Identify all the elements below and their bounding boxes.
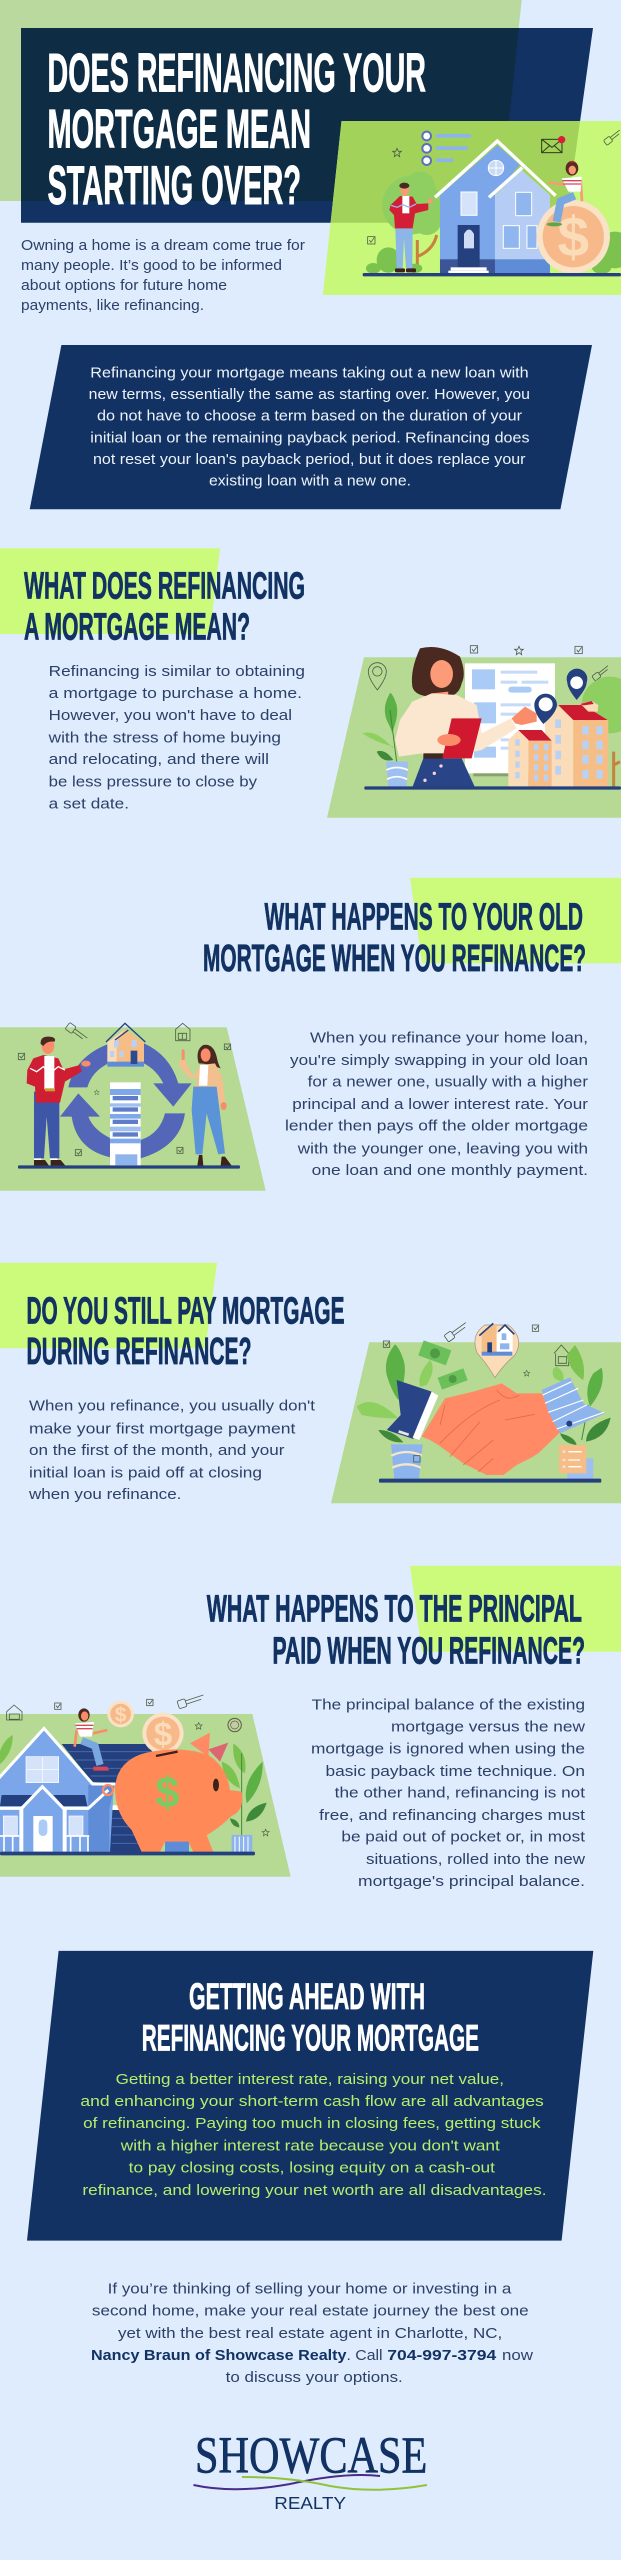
icon: checkbox — [75, 1150, 81, 1156]
text block: advantages and disadvantages — [80, 2072, 547, 2199]
panel: hero illustration — [323, 121, 621, 295]
tree — [582, 677, 621, 787]
intro text: many people. It’s good to be informed — [21, 258, 282, 274]
icon: coin outline — [228, 1718, 241, 1732]
coin small — [107, 1701, 134, 1727]
house — [435, 141, 556, 274]
panel: definition callout — [30, 345, 592, 509]
text block: principal balance: the other hand, refinancing is not — [335, 1786, 585, 1802]
icon: star — [262, 1829, 269, 1836]
house — [106, 1023, 145, 1067]
tree — [366, 172, 442, 274]
panel: getting ahead callout — [27, 1951, 593, 2241]
text block: refinancing similar: Refinancing is similar to obtaining — [49, 664, 305, 680]
icon: checkbox — [532, 1325, 539, 1331]
coin large: $ — [154, 1716, 173, 1753]
icon: checkbox — [575, 646, 582, 654]
text block: refinancing similar: However, you won't have to deal — [49, 708, 292, 724]
icon: star — [393, 148, 401, 157]
bush — [592, 232, 621, 274]
icon: checkbox — [224, 1044, 231, 1050]
listing board — [465, 663, 555, 776]
panel: title block — [21, 28, 593, 223]
text block: principal balance: mortgage is ignored when using the — [311, 1741, 585, 1757]
text block: when you refinance: lender then pays off the older mortgage — [285, 1119, 588, 1135]
woman on coin — [547, 161, 582, 226]
coin: $ — [558, 207, 589, 270]
text block: call to action: If you’re thinking of selling your home or investing in a — [108, 2282, 512, 2298]
text block: principal balance: The principal balance of the existing — [312, 1697, 585, 1713]
panel: handshake illustration — [331, 1321, 621, 1503]
man — [27, 1037, 91, 1166]
icon: star — [515, 646, 523, 655]
text block: first mortgage payment: When you refinance, you usually don't — [29, 1399, 315, 1415]
panel: agent illustration — [327, 646, 621, 818]
icon: house outline — [554, 1345, 569, 1366]
right cuff — [542, 1377, 605, 1433]
logo: Showcase Realty: SHOWCASE — [195, 2428, 427, 2485]
plant pot — [391, 1444, 423, 1479]
panel: definition callout: new terms, essentially the same as starting over. However, you — [89, 387, 530, 403]
text block: call to action: yet with the best real estate agent in Charlotte, NC, — [118, 2326, 502, 2342]
icon: checkbox — [147, 1699, 153, 1706]
coin large — [142, 1713, 184, 1754]
left cuff — [387, 1380, 438, 1440]
piggy bank: $ — [155, 1769, 179, 1817]
icon: star — [524, 1370, 530, 1376]
heading: what does refinancing a mortgage mean — [24, 565, 305, 648]
ground line — [364, 786, 621, 790]
dark roof — [62, 1744, 160, 1852]
section tab: principal paid — [410, 1566, 621, 1652]
panel: definition callout: Refinancing your mortgage means taking out a new loan with — [90, 365, 529, 381]
text block: call to action: 704-997-3794 — [387, 2348, 497, 2364]
text block: refinancing similar: with the stress of home buying — [48, 730, 281, 746]
text block: principal balance — [311, 1697, 586, 1890]
text block: call to action: Nancy Braun of Showcase Realty — [91, 2348, 347, 2364]
intro text: Owning a home is a dream come true for — [21, 238, 305, 254]
icon: location pin small — [534, 694, 557, 724]
plant — [222, 1743, 267, 1852]
buildings — [508, 701, 608, 787]
woman on roof — [75, 1708, 109, 1771]
logo: Showcase Realty — [194, 2428, 427, 2513]
icon: location pin large — [567, 669, 587, 700]
title — [48, 42, 426, 216]
section tab: old mortgage — [410, 878, 621, 963]
heading: do you still pay mortgage: DURING REFINANCE? — [26, 1330, 252, 1373]
icon: key — [592, 664, 611, 681]
icon: key — [603, 129, 621, 145]
coin — [537, 200, 610, 273]
ground line — [363, 273, 621, 276]
icon: checkbox — [18, 1053, 25, 1060]
heading: getting ahead: GETTING AHEAD WITH — [189, 1975, 425, 2017]
panel: header background shape — [0, 0, 522, 201]
text block: principal balance: free, and refinancing charges must — [319, 1808, 585, 1824]
icon: key — [444, 1321, 469, 1342]
text block: advantages and disadvantages: and enhancing your short-term cash flow are all advantages — [80, 2094, 544, 2110]
text block: call to action: . Call — [346, 2348, 382, 2364]
title: MORTGAGE MEAN — [48, 98, 311, 160]
text block: refinancing similar: be less pressure to close by — [49, 775, 258, 791]
intro text — [21, 238, 305, 314]
text block: when you refinance: one loan and one monthly payment. — [312, 1163, 588, 1179]
text block: advantages and disadvantages: of refinancing. Paying too much in closing fees, getting stuck — [83, 2116, 541, 2132]
left plant — [0, 1735, 13, 1767]
text block: when you refinance: When you refinance your home loan, — [310, 1030, 588, 1046]
panel: definition callout: do not have to choose a term based on the duration of your — [97, 409, 522, 425]
clipboard — [559, 1445, 593, 1479]
icon: key — [65, 1022, 89, 1043]
text block: refinancing similar: a mortgage to purchase a home. — [49, 686, 302, 702]
text block: refinancing similar: a set date. — [49, 797, 129, 813]
text block: principal balance: be paid out of pocket or, in most — [341, 1830, 585, 1846]
icon: applicants list — [421, 131, 471, 166]
icon: outline pin — [368, 663, 386, 690]
panel: definition callout: not reset your loan's payback period, but it does replace your — [93, 452, 526, 468]
building — [110, 1082, 141, 1166]
plants — [357, 1344, 611, 1445]
text block: first mortgage payment: when you refinance. — [28, 1487, 181, 1503]
icon: star — [195, 1723, 202, 1729]
text block: when you refinance — [285, 1030, 588, 1179]
text block: principal balance: basic payback time technique. On — [326, 1764, 585, 1780]
panel: definition callout: initial loan or the remaining payback period. Refinancing does — [90, 430, 530, 446]
heading: getting ahead — [142, 1975, 479, 2058]
heading: do you still pay mortgage: DO YOU STILL PAY MORTGAGE — [26, 1289, 344, 1332]
icon: star — [94, 1090, 99, 1095]
icon: checkbox — [177, 1147, 183, 1153]
heading: what does refinancing a mortgage mean: WHAT DOES REFINANCING — [24, 565, 305, 608]
text block: call to action: now — [502, 2348, 534, 2364]
text block: advantages and disadvantages: refinance, and lowering your net worth are all disadvantages. — [82, 2183, 547, 2199]
panel: piggy bank illustration — [0, 1693, 291, 1877]
rose ring — [103, 1785, 113, 1795]
heading: what does refinancing a mortgage mean: A MORTGAGE MEAN? — [24, 605, 250, 648]
panel: definition callout: existing loan with a new one. — [209, 474, 411, 490]
text block: advantages and disadvantages: with a higher interest rate because you don't want — [120, 2139, 500, 2155]
text block: first mortgage payment: on the first of the month, and your — [29, 1443, 285, 1459]
arrows: refinance cycle — [60, 1043, 192, 1158]
text block: first mortgage payment: make your first mortgage payment — [29, 1421, 295, 1437]
piggy bank — [115, 1733, 242, 1852]
icon: key — [177, 1693, 205, 1709]
ground line — [379, 1479, 601, 1483]
coin small: $ — [115, 1704, 127, 1727]
icon: house outline — [7, 1705, 22, 1720]
text block: first mortgage payment: initial loan is paid off at closing — [29, 1465, 262, 1481]
text block: when you refinance: for a newer one, usually with a higher — [308, 1075, 588, 1091]
title: STARTING OVER? — [48, 154, 301, 216]
text block: when you refinance: with the younger one, leaving you with — [297, 1141, 588, 1157]
intro text: about options for future home — [21, 278, 227, 294]
logo: Showcase Realty: REALTY — [274, 2493, 346, 2513]
house — [0, 1728, 115, 1852]
icon: checkbox — [368, 237, 375, 244]
icon: checkbox — [383, 1341, 390, 1347]
text block: refinancing similar: and relocating, and there will — [49, 752, 269, 768]
text block: principal balance: situations, rolled into the new — [366, 1852, 586, 1868]
text block: advantages and disadvantages: Getting a better interest rate, raising your net value, — [116, 2072, 504, 2088]
section tab: what does refinancing mean — [0, 548, 220, 634]
section tab: do you still pay — [0, 1263, 217, 1348]
icon: pin with house — [475, 1323, 519, 1378]
heading: do you still pay mortgage — [26, 1289, 344, 1373]
text block: call to action: to discuss your options. — [226, 2370, 403, 2386]
panel: swap illustration — [0, 1022, 266, 1191]
text block: when you refinance: principal and a lower interest rate. Your — [292, 1097, 588, 1113]
text block: when you refinance: you're simply swapping in your old loan — [290, 1053, 588, 1069]
icon: money bills — [418, 1340, 468, 1390]
woman presenter — [395, 647, 537, 787]
text block: refinancing similar — [48, 664, 305, 813]
heading: what happens to your old mortgage — [203, 895, 586, 980]
ground line — [0, 1852, 255, 1855]
icon: checkbox — [470, 646, 478, 653]
intro text: payments, like refinancing. — [21, 298, 204, 314]
icon: checkbox — [55, 1703, 61, 1709]
handshake — [422, 1383, 561, 1475]
woman — [179, 1045, 232, 1166]
heading: what happens to the principal — [207, 1588, 585, 1672]
text block: call to action: second home, make your real estate journey the best one — [92, 2304, 529, 2320]
icon: envelope — [542, 136, 565, 153]
icon: house outline — [176, 1023, 190, 1041]
text block: advantages and disadvantages: to pay closing costs, losing equity on a cash-out — [129, 2160, 495, 2176]
ground line — [18, 1165, 240, 1169]
text block: call to action — [91, 2282, 534, 2386]
man — [389, 183, 433, 272]
text block: principal balance: mortgage's principal balance. — [358, 1874, 585, 1890]
plant — [362, 693, 408, 787]
text block: principal balance: mortgage versus the new — [391, 1720, 586, 1736]
text block: first mortgage payment — [28, 1399, 315, 1503]
